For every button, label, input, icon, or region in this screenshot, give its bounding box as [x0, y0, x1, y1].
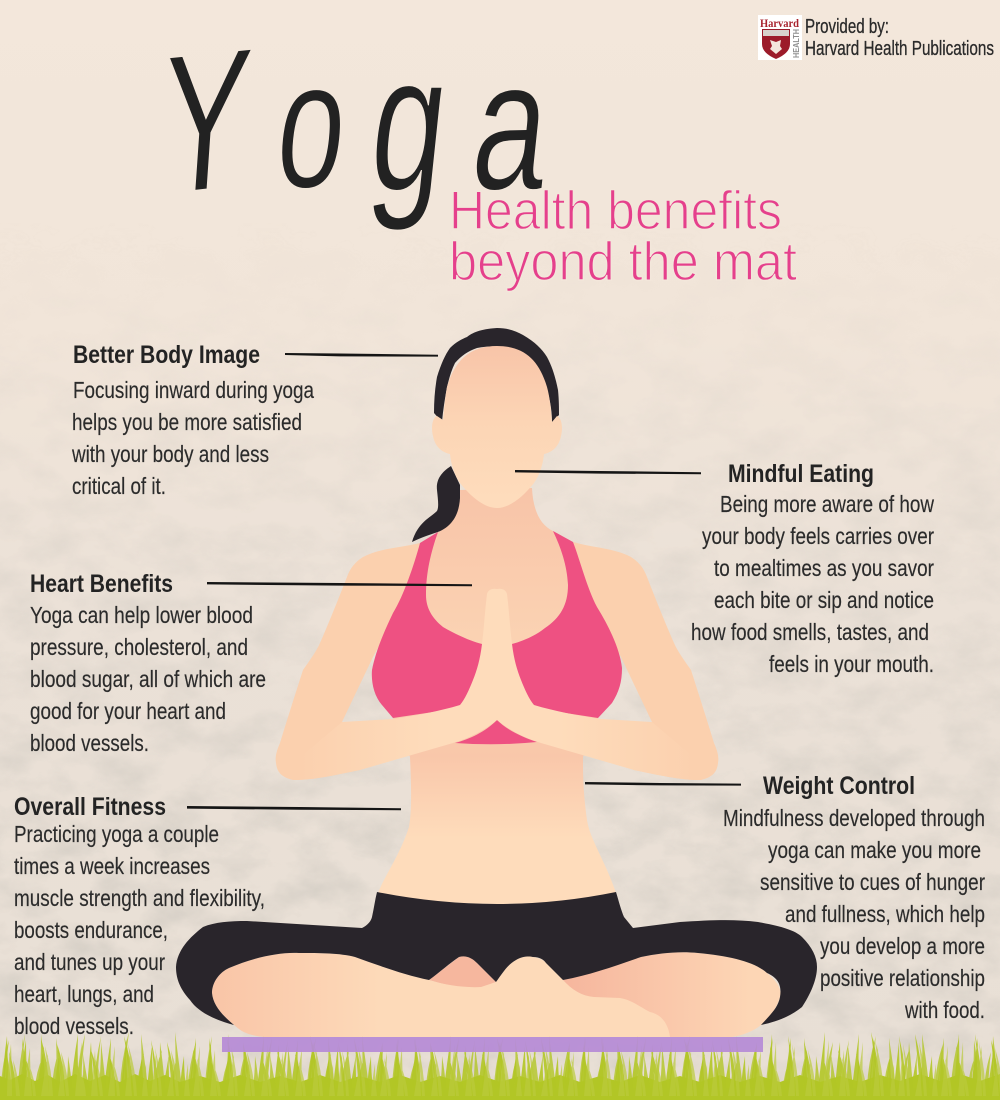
body text: to mealtimes as you savor: [714, 555, 934, 581]
body text: your body feels carries over: [702, 523, 934, 549]
praying hands and forearms: [285, 589, 709, 780]
panel: weight control: [723, 772, 985, 1023]
panel: better body image: [71, 341, 314, 499]
leader line: overall fitness: [187, 806, 401, 810]
body text: critical of it.: [72, 473, 166, 499]
leader line: weight control: [585, 782, 741, 786]
pink sports bra: [372, 531, 622, 744]
body text: [723, 805, 985, 1023]
subtitle: [449, 179, 797, 292]
body text: feels in your mouth.: [769, 651, 934, 677]
heading: Heart Benefits: [30, 570, 173, 598]
body text: Focusing inward during yoga: [73, 377, 314, 403]
provider text: [805, 16, 994, 60]
purple yoga mat: [222, 1037, 763, 1052]
body text: good for your heart and: [30, 698, 226, 724]
body text: Yoga can help lower blood: [30, 602, 253, 628]
body text: heart, lungs, and: [14, 981, 154, 1007]
body text: boosts endurance,: [14, 917, 168, 943]
body text: Being more aware of how: [720, 491, 934, 517]
title: Yoga: o: [268, 23, 357, 226]
legs: [212, 952, 780, 1037]
body text: blood sugar, all of which are: [30, 666, 266, 692]
title: Yoga: g: [362, 14, 458, 232]
title: Yoga: Y: [154, 5, 258, 237]
leader line: heart benefits: [207, 582, 472, 586]
title: Yoga: [154, 5, 559, 237]
left arm: [276, 537, 438, 780]
heading: Overall Fitness: [14, 793, 166, 821]
subtitle: beyond the mat: [449, 230, 797, 292]
body text: times a week increases: [14, 853, 210, 879]
icon: Harvard Health logo: HEALTH: [792, 29, 801, 58]
ponytail: [412, 466, 460, 542]
body text: Practicing yoga a couple: [14, 821, 219, 847]
body text: [14, 821, 265, 1039]
black leggings: [176, 892, 817, 1025]
hair: [434, 328, 559, 422]
panel: mindful eating: [691, 460, 934, 677]
torso: [372, 488, 622, 904]
body text: with your body and less: [71, 441, 269, 467]
leader line: better body image: [285, 353, 438, 357]
body text: [691, 491, 934, 677]
body text: how food smells, tastes, and: [691, 619, 929, 645]
heading: Weight Control: [763, 772, 915, 800]
head: [432, 346, 562, 508]
icon: Harvard Health logo: Harvard: [760, 16, 799, 30]
body text: and tunes up your: [14, 949, 165, 975]
subtitle: Health benefits: [449, 179, 782, 241]
heading: Mindful Eating: [728, 460, 874, 488]
body text: [30, 602, 266, 756]
body text: pressure, cholesterol, and: [30, 634, 248, 660]
right arm: [556, 537, 718, 780]
heel: [429, 956, 496, 988]
provider text: Provided by:: [805, 16, 889, 38]
body text: [71, 377, 314, 499]
grass: [0, 1032, 1000, 1100]
leader line: mindful eating: [515, 470, 701, 474]
heading: Better Body Image: [73, 341, 260, 369]
body text: each bite or sip and notice: [714, 587, 934, 613]
panel: overall fitness: [14, 793, 265, 1039]
title: Yoga: a: [464, 23, 559, 229]
right leg: [563, 952, 780, 1037]
panel: heart benefits: [30, 570, 266, 756]
body text: helps you be more satisfied: [72, 409, 302, 435]
body text: muscle strength and flexibility,: [14, 885, 265, 911]
illustration: seated woman in yoga pose: [176, 328, 817, 1037]
left leg and foot: [212, 953, 670, 1037]
body text: blood vessels.: [14, 1013, 134, 1039]
icon: Harvard Health logo: [758, 15, 802, 60]
provider credit: [758, 15, 994, 60]
mottled texture: [0, 488, 1000, 1082]
body text: blood vessels.: [30, 730, 149, 756]
